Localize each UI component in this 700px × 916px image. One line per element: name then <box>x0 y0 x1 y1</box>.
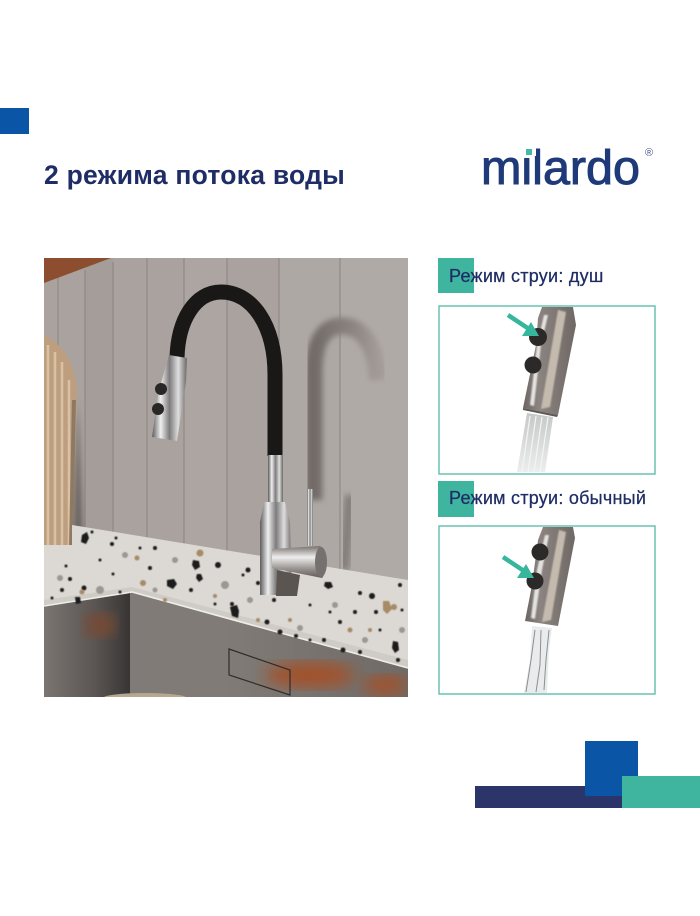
mode 2 heading <box>438 481 646 517</box>
spray head <box>525 527 575 626</box>
dark base <box>276 570 300 596</box>
panel: shower mode <box>438 305 656 475</box>
frame <box>439 306 655 474</box>
button top <box>532 544 548 560</box>
faucet <box>152 292 327 596</box>
decorative blocks, bottom right <box>475 741 700 808</box>
decorative blue square, top left <box>0 108 29 134</box>
mode 1 heading <box>438 258 604 293</box>
label: shower mode: Режим струи: душ <box>449 266 604 286</box>
arrow <box>503 557 534 578</box>
frame <box>439 526 655 694</box>
button bottom <box>524 356 542 374</box>
faucet shadow on wall <box>314 326 378 500</box>
pull-out spray head <box>152 355 187 441</box>
button bottom <box>526 572 544 590</box>
logo: milardo: milardo <box>481 142 640 195</box>
photo: kitchen faucet with black flexible hose <box>44 258 408 697</box>
lever handle <box>272 546 326 578</box>
second shadow of rod <box>344 495 350 570</box>
terrazzo countertop <box>44 525 408 668</box>
teal accent square <box>438 481 474 517</box>
chrome body <box>260 502 292 595</box>
teal accent square <box>438 258 474 293</box>
spray water <box>517 413 553 472</box>
title: 2 режима потока воды <box>44 160 345 190</box>
logo: milardo: ® <box>645 147 653 159</box>
wall panels <box>44 258 408 598</box>
small pull rod <box>307 489 313 546</box>
wooden cutting board <box>44 335 84 548</box>
orange shelf <box>44 258 111 283</box>
teal block <box>622 776 700 808</box>
button top <box>529 328 547 346</box>
water stream <box>524 626 552 693</box>
arrow <box>508 315 539 336</box>
navy bar <box>475 786 622 808</box>
black flexible hose <box>177 292 275 456</box>
blue square <box>585 741 638 796</box>
sink basin <box>44 592 408 703</box>
chrome riser <box>268 455 283 502</box>
panel: normal mode <box>438 525 656 695</box>
spray head <box>523 307 576 417</box>
label: normal mode: Режим струи: обычный <box>449 488 646 508</box>
